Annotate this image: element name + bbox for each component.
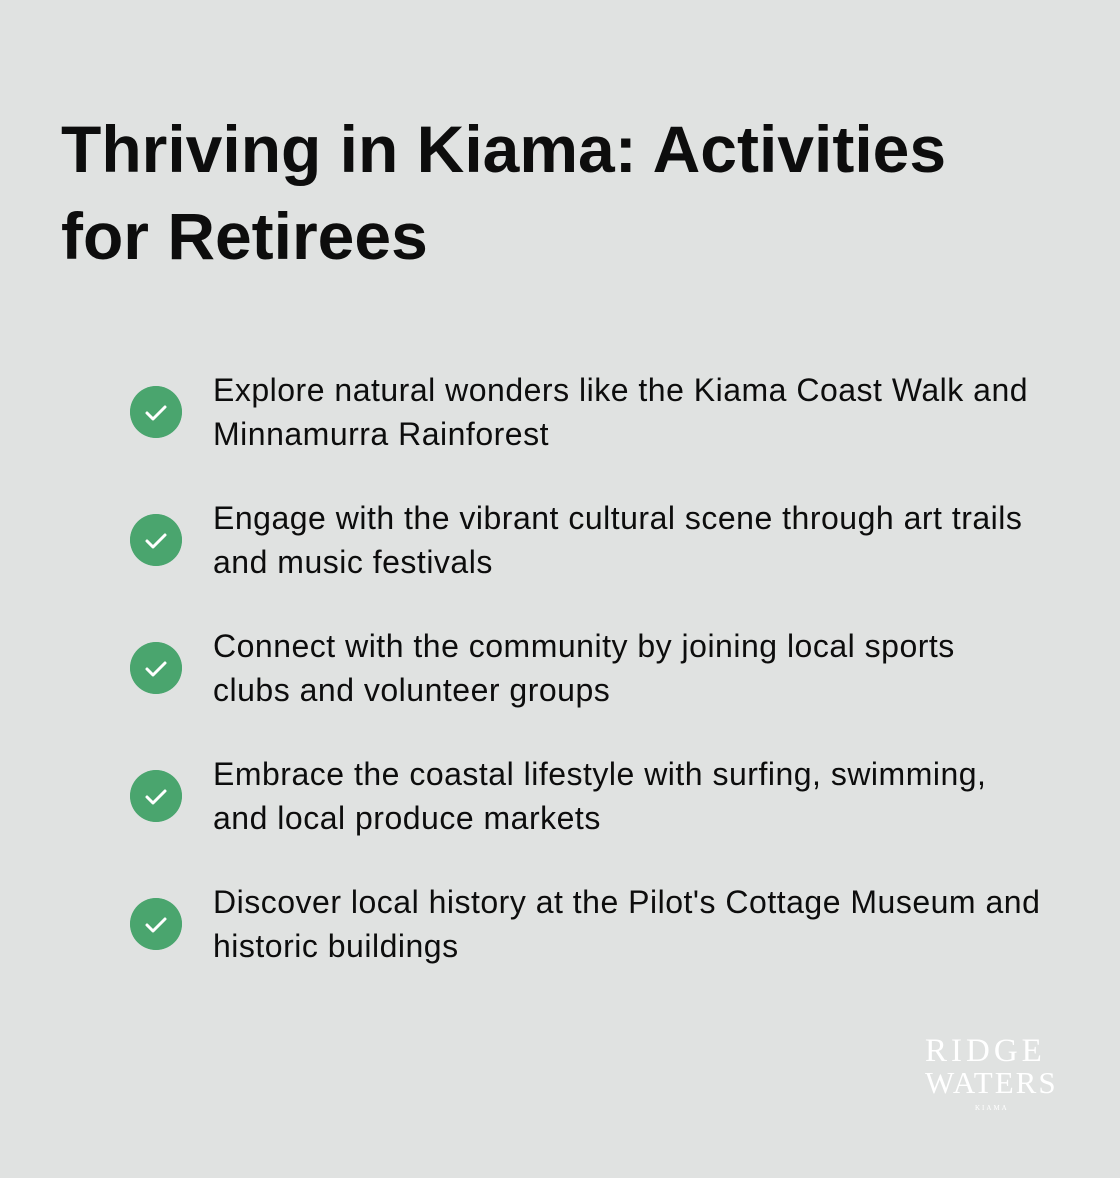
logo: KIAMA xyxy=(975,1104,1009,1112)
text: and local produce markets xyxy=(213,800,601,836)
text: Minnamurra Rainforest xyxy=(213,416,549,452)
title xyxy=(61,112,946,273)
text: Explore natural wonders like the Kiama Coast Walk and xyxy=(213,372,1028,408)
item 5 xyxy=(130,884,1040,964)
icon: check xyxy=(130,642,182,694)
text: Discover local history at the Pilot's Cottage Museum and xyxy=(213,884,1040,920)
text: clubs and volunteer groups xyxy=(213,672,610,708)
text xyxy=(213,884,1040,964)
text xyxy=(213,628,955,708)
item 3 xyxy=(130,628,955,708)
item 2 xyxy=(130,500,1022,580)
text xyxy=(213,372,1028,452)
icon: check xyxy=(130,386,182,438)
text xyxy=(213,500,1022,580)
title: for Retirees xyxy=(61,199,428,273)
logo xyxy=(925,1033,1058,1112)
icon: check xyxy=(130,514,182,566)
item 4 xyxy=(130,756,986,836)
logo: RIDGE xyxy=(925,1033,1046,1069)
logo: WATERS xyxy=(925,1065,1058,1100)
title: Thriving in Kiama: Activities xyxy=(61,112,946,186)
icon: check xyxy=(130,770,182,822)
text xyxy=(213,756,986,836)
text: Connect with the community by joining local sports xyxy=(213,628,955,664)
text: Embrace the coastal lifestyle with surfing, swimming, xyxy=(213,756,986,792)
text: historic buildings xyxy=(213,928,459,964)
icon: check xyxy=(130,898,182,950)
item 1 xyxy=(130,372,1028,452)
text: and music festivals xyxy=(213,544,493,580)
text: Engage with the vibrant cultural scene through art trails xyxy=(213,500,1022,536)
